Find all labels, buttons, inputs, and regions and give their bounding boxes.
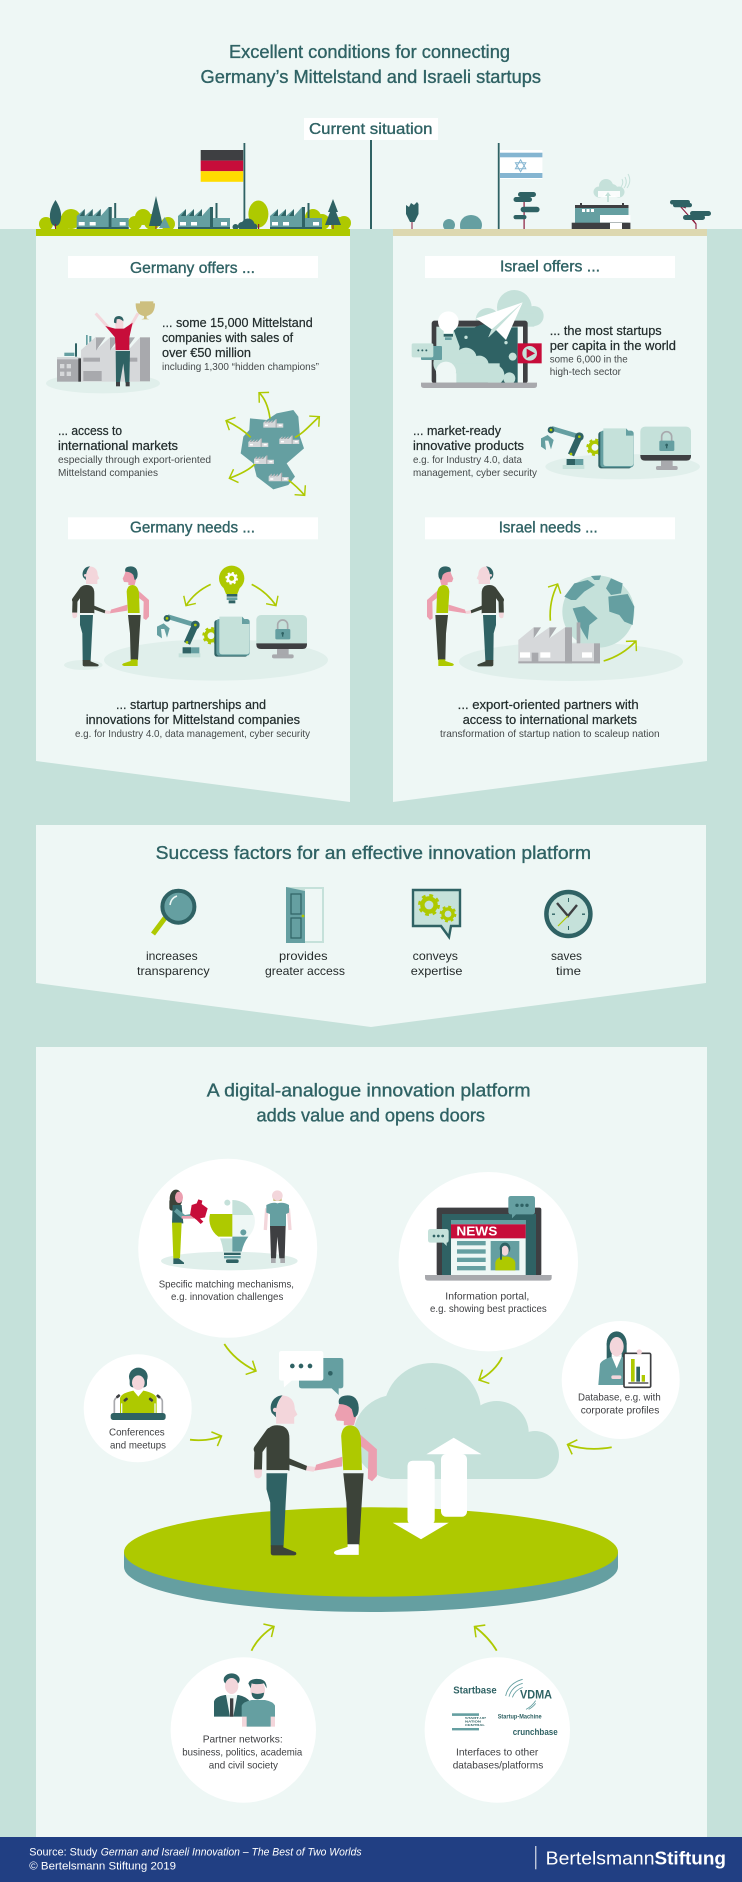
heading: Germany needs: Germany needs ...	[130, 520, 255, 537]
heading: Israel offers: Israel offers ...	[500, 259, 600, 276]
text: matching mechanisms: e.g. innovation challenges	[171, 1291, 283, 1303]
label: conveys expertise: conveys	[413, 949, 458, 963]
text: startup partnerships and innovations: ... startup partnerships and	[116, 697, 266, 712]
heading: innovation platform: adds value and opens doors	[256, 1106, 485, 1126]
logos: partner platforms	[452, 1679, 558, 1738]
text: startup partnerships and innovations: innovations for Mittelstand companies	[86, 712, 300, 727]
heading: Germany needs	[68, 517, 318, 539]
logo: Bertelsmann Stiftung: Stiftung	[654, 1848, 726, 1868]
icon: speaker at podium	[111, 1368, 166, 1420]
text: information portal	[430, 1290, 547, 1315]
arrow: from information portal	[479, 1357, 502, 1380]
arrow: from matching mechanisms	[224, 1344, 256, 1371]
landscape: Germany	[36, 196, 351, 236]
text: database	[578, 1392, 661, 1416]
arrow: data up	[426, 1438, 482, 1517]
text: information portal: e.g. showing best practices	[430, 1303, 547, 1315]
heading: Israel needs: Israel needs ...	[499, 520, 598, 537]
divider pole	[370, 140, 372, 229]
label: provides greater access	[265, 949, 345, 978]
text: information portal: Information portal,	[445, 1290, 529, 1302]
logos: partner platforms: VDMA	[520, 1687, 552, 1701]
heading: current situation	[304, 118, 438, 140]
text: market-ready innovative products: innovative products	[413, 438, 524, 453]
text: access to international markets: especially through export-oriented	[58, 454, 211, 466]
title: Germany’s Mittelstand and Israeli startups	[200, 67, 541, 87]
logos: partner platforms: crunchbase	[513, 1727, 558, 1738]
circle: interfaces	[425, 1657, 570, 1803]
logo: Bertelsmann Stiftung	[535, 1846, 726, 1869]
text: partner networks: Partner networks:	[203, 1733, 283, 1745]
heading: Israel needs	[425, 517, 675, 539]
people shaking hands	[241, 1395, 377, 1561]
cloud	[353, 1363, 559, 1479]
flag: Germany	[201, 143, 245, 229]
title	[200, 42, 541, 87]
text: export-oriented partners: transformation of startup nation to scaleup nation	[440, 728, 660, 740]
text: startup partnerships and innovations	[75, 697, 311, 740]
flag: Israel	[498, 143, 542, 229]
text: access to international markets: international markets	[58, 438, 178, 453]
icon: news laptop	[425, 1196, 552, 1281]
logos: partner platforms: CENTRAL	[465, 1723, 486, 1727]
arrow: from database	[568, 1444, 612, 1449]
logos: partner platforms: Startbase	[453, 1685, 497, 1696]
text: database: Database, e.g. with	[578, 1392, 661, 1404]
text: 15,000 Mittelstand companies: over €50 million	[162, 345, 251, 360]
arrow: from partner networks	[252, 1626, 274, 1651]
label: increases transparency: transparency	[137, 964, 210, 978]
illustration: robot, document and secure monitor	[541, 427, 700, 479]
text: partner networks	[182, 1733, 302, 1771]
source text: Source: Study	[29, 1847, 98, 1859]
circle: matching mechanisms	[138, 1159, 317, 1338]
icon: news laptop: NEWS	[456, 1224, 497, 1239]
text: matching mechanisms	[159, 1278, 294, 1303]
panel: Germany	[36, 236, 350, 802]
landscape: Israel	[393, 174, 711, 236]
heading: Germany offers: Germany offers ...	[130, 260, 255, 277]
illustration: champion in front of factory	[46, 301, 160, 393]
text: database: corporate profiles	[581, 1404, 659, 1416]
text: most startups per capita: ... the most startups	[550, 323, 662, 338]
heading: Germany offers	[68, 256, 318, 278]
text: partner networks: business, politics, academia	[182, 1746, 302, 1758]
text: startup partnerships and innovations: e.g. for Industry 4.0, data management, cyber security	[75, 728, 311, 740]
heading: Israel offers	[425, 256, 675, 278]
footer	[0, 1837, 742, 1882]
label: saves time	[551, 949, 582, 978]
heading: success factors: Success factors for an effective innovation platform	[156, 843, 591, 863]
text: interfaces	[453, 1746, 543, 1771]
heading: current situation: Current situation	[309, 121, 432, 138]
arrow: data down	[393, 1461, 449, 1539]
logo: Bertelsmann Stiftung: Bertelsmann	[546, 1848, 654, 1868]
source text	[29, 1847, 362, 1872]
circle: information portal	[399, 1172, 578, 1351]
text: export-oriented partners: access to international markets	[463, 712, 637, 727]
text: export-oriented partners	[440, 697, 660, 740]
arrow: from conferences	[190, 1436, 222, 1440]
text: interfaces: databases/platforms	[453, 1759, 543, 1771]
label: saves time: time	[556, 964, 581, 978]
text: interfaces: Interfaces to other	[456, 1746, 539, 1758]
text: conferences and meetups	[109, 1426, 166, 1451]
label: saves time: saves	[551, 949, 582, 963]
illustration: map of Germany with export arrows	[226, 393, 319, 495]
label: provides greater access: provides	[279, 949, 328, 963]
text: access to international markets	[58, 423, 211, 479]
arrow: from interfaces	[474, 1626, 497, 1651]
icon: woman presenting chart	[598, 1331, 651, 1387]
sky band	[0, 0, 742, 229]
circle: database	[562, 1321, 680, 1439]
logos: partner platforms: START-UP	[465, 1716, 486, 1720]
source text: German and Israeli Innovation – The Best of Two Worlds	[101, 1847, 362, 1859]
label: conveys expertise	[411, 949, 463, 978]
label: conveys expertise: expertise	[411, 964, 463, 978]
text: 15,000 Mittelstand companies: companies with sales of	[162, 330, 293, 345]
text: export-oriented partners: ... export-oriented partners with	[458, 697, 639, 712]
title: Excellent conditions for connecting	[229, 42, 510, 62]
text: market-ready innovative products	[413, 423, 538, 479]
text: 15,000 Mittelstand companies: including 1,300 “hidden champions”	[162, 361, 319, 373]
platform disc	[124, 1507, 618, 1612]
icon: magnifying glass	[153, 891, 194, 934]
panel: Israel	[393, 236, 707, 802]
text: most startups per capita: some 6,000 in the	[550, 353, 628, 365]
text: 15,000 Mittelstand companies: ... some 15,000 Mittelstand	[162, 315, 313, 330]
circle: conferences and meetups	[84, 1354, 192, 1462]
circle: partner networks	[171, 1657, 316, 1803]
panel: innovation platform	[36, 1047, 707, 1837]
text: market-ready innovative products: e.g. for Industry 4.0, data	[413, 454, 522, 466]
text: partner networks: and civil society	[209, 1759, 279, 1771]
icon: partners	[214, 1673, 275, 1727]
panel: success factors	[36, 825, 706, 1027]
icon: clock	[546, 892, 590, 936]
text: 15,000 Mittelstand companies	[162, 315, 319, 373]
text: market-ready innovative products: ... market-ready	[413, 423, 501, 438]
source text: © Bertelsmann Stiftung 2019	[29, 1860, 176, 1872]
icon: people completing puzzle bulb	[161, 1190, 298, 1270]
label: increases transparency	[137, 949, 210, 978]
icon: open door	[286, 887, 324, 943]
text: access to international markets: Mittelstand companies	[58, 467, 158, 479]
label: provides greater access: greater access	[265, 964, 345, 978]
text: market-ready innovative products: management, cyber security	[413, 467, 538, 479]
text: access to international markets: ... access to	[58, 423, 122, 438]
logos: partner platforms: Startup-Machine	[498, 1714, 542, 1720]
label: increases transparency: increases	[146, 949, 198, 963]
text: conferences and meetups: Conferences	[109, 1426, 165, 1438]
text: most startups per capita: high-tech sector	[550, 366, 621, 378]
text: matching mechanisms: Specific matching mechanisms,	[159, 1278, 294, 1290]
text: most startups per capita	[550, 323, 676, 378]
heading: innovation platform	[207, 1081, 531, 1126]
heading: innovation platform: A digital-analogue innovation platform	[207, 1081, 531, 1101]
illustration: startup laptop with cloud and paper plane	[412, 290, 544, 388]
text: conferences and meetups: and meetups	[110, 1439, 166, 1451]
illustration: handshake, globe and factory	[427, 566, 683, 681]
speech bubbles	[279, 1351, 343, 1395]
text: most startups per capita: per capita in the world	[550, 338, 676, 353]
logos: partner platforms: NATION	[465, 1720, 481, 1724]
illustration: handshake, idea bulb and technologies	[64, 566, 328, 681]
icon: speech bubble with gears	[413, 890, 460, 937]
